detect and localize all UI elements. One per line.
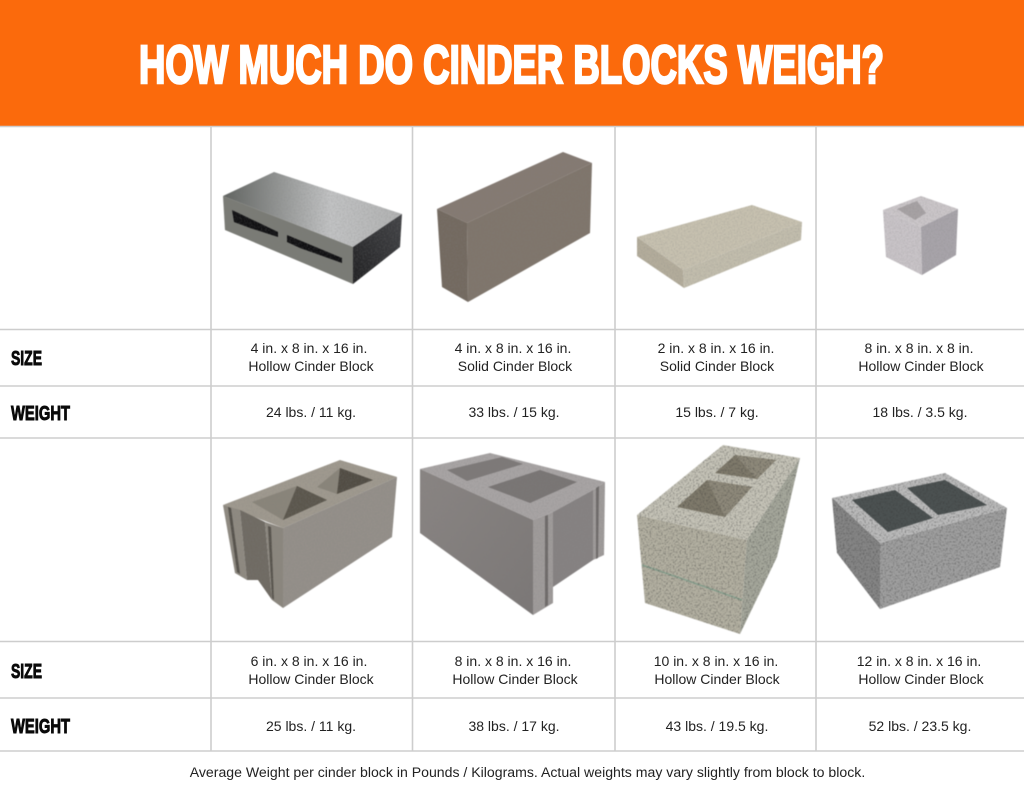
weight text: 52 lbs: 52 lbs. / 23.5 kg.	[869, 718, 971, 734]
size text: 4x8x16 hollow: Hollow Cinder Block	[248, 358, 375, 374]
size text: 10x8x16 hollow	[654, 653, 781, 687]
weight text: 15 lbs: 15 lbs. / 7 kg.	[675, 404, 759, 420]
size text: 12x8x16 hollow: 12 in. x 8 in. x 16 in.	[857, 653, 981, 669]
size text: 10x8x16 hollow: 10 in. x 8 in. x 16 in.	[654, 653, 778, 669]
size text: 4x8x16 hollow	[248, 340, 375, 374]
size text: 6x8x16 hollow: 6 in. x 8 in. x 16 in.	[251, 653, 367, 669]
weight text: 38 lbs: 38 lbs. / 17 kg.	[468, 718, 560, 734]
size text: 8x8x8 hollow: Hollow Cinder Block	[858, 358, 985, 374]
block image: 8x8x16 hollow	[420, 453, 605, 615]
weight text: 24 lbs: 24 lbs. / 11 kg.	[266, 404, 356, 420]
row label: weight, row 2: WEIGHT	[11, 716, 70, 738]
weight text: 25 lbs: 25 lbs. / 11 kg.	[266, 718, 356, 734]
size text: 8x8x8 hollow: 8 in. x 8 in. x 8 in.	[865, 340, 973, 356]
size text: 10x8x16 hollow: Hollow Cinder Block	[654, 671, 781, 687]
block image: 4x8x16 hollow	[223, 172, 402, 284]
size text: 2x8x16 solid: Solid Cinder Block	[660, 358, 775, 374]
size text: 8x8x16 hollow	[452, 653, 579, 687]
size text: 4x8x16 hollow: 4 in. x 8 in. x 16 in.	[251, 340, 367, 356]
size text: 2x8x16 solid: 2 in. x 8 in. x 16 in.	[658, 340, 774, 356]
block image: 8x8x8 hollow	[883, 196, 958, 275]
size text: 4x8x16 solid: Solid Cinder Block	[458, 358, 573, 374]
size text: 6x8x16 hollow: Hollow Cinder Block	[248, 671, 375, 687]
size text: 2x8x16 solid	[658, 340, 775, 374]
size text: 12x8x16 hollow: Hollow Cinder Block	[858, 671, 985, 687]
block image: 4x8x16 solid	[437, 152, 592, 302]
block image: 10x8x16 hollow	[637, 445, 800, 634]
block image: 6x8x16 hollow	[223, 460, 397, 608]
block image: 12x8x16 hollow	[832, 473, 1007, 609]
footnote: Average Weight per cinder block in Pounds / Kilograms. Actual weights may vary slightly from block to block.	[190, 764, 865, 780]
weight text: 43 lbs: 43 lbs. / 19.5 kg.	[666, 718, 768, 734]
size text: 8x8x8 hollow	[858, 340, 985, 374]
size text: 6x8x16 hollow	[248, 653, 375, 687]
weight text: 18 lbs: 18 lbs. / 3.5 kg.	[873, 404, 967, 420]
header banner	[0, 0, 1024, 126]
size text: 12x8x16 hollow	[857, 653, 985, 687]
row label: weight, row 1: WEIGHT	[11, 403, 70, 425]
weight text: 33 lbs: 33 lbs. / 15 kg.	[468, 404, 560, 420]
size text: 4x8x16 solid	[455, 340, 573, 374]
block image: 2x8x16 solid	[637, 205, 802, 288]
row label: size, row 2: SIZE	[11, 661, 42, 683]
size text: 8x8x16 hollow: 8 in. x 8 in. x 16 in.	[455, 653, 571, 669]
size text: 8x8x16 hollow: Hollow Cinder Block	[452, 671, 579, 687]
row label: size, row 1: SIZE	[11, 348, 42, 370]
size text: 4x8x16 solid: 4 in. x 8 in. x 16 in.	[455, 340, 571, 356]
